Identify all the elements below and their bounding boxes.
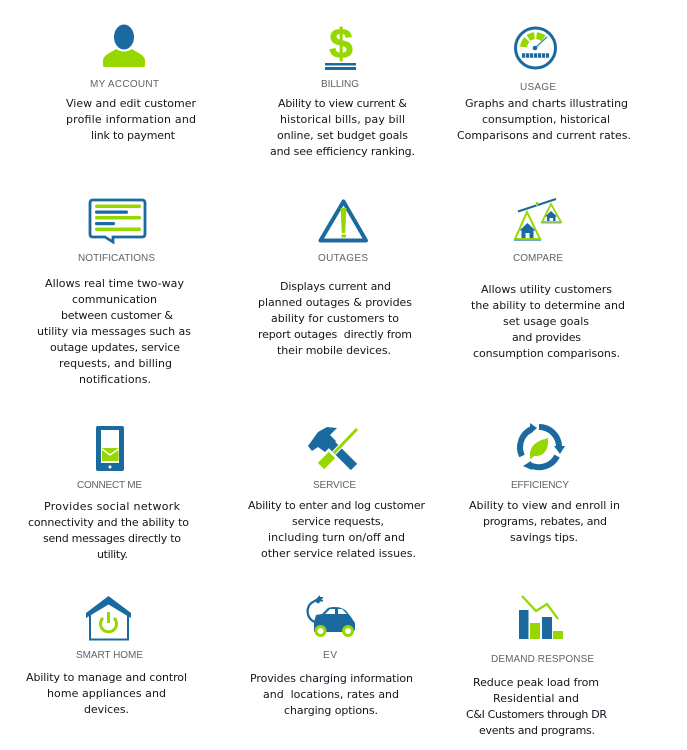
icon: hammer and screwdriver (308, 427, 357, 467)
panel: compare (471, 199, 625, 360)
text block (469, 499, 620, 544)
text block: Displays current and (280, 280, 391, 293)
text block: online, set budget goals (277, 129, 408, 142)
panel: efficiency (469, 423, 620, 544)
text block: historical bills, pay bill (280, 113, 405, 126)
text block: savings tips. (510, 531, 578, 544)
text block: Comparisons and current rates. (457, 129, 631, 142)
text block: link to payment (91, 129, 176, 142)
text block (270, 97, 415, 158)
panel: billing (270, 20, 415, 158)
text block: consumption, historical (482, 113, 610, 126)
text block: report outages directly from (258, 328, 412, 341)
icon: bar chart with trend line (519, 596, 563, 639)
panel: service (248, 427, 425, 560)
text block: ability for customers to (271, 312, 399, 325)
text block (250, 672, 413, 717)
text block (457, 97, 631, 142)
text block: send messages directly to (43, 532, 181, 545)
text block: other service related issues. (261, 547, 416, 560)
text block: between customer & (61, 309, 173, 322)
icon: phone with envelope (96, 426, 124, 471)
icon: speech bubble (90, 200, 145, 242)
icon: warning triangle (320, 202, 366, 240)
text block: Provides social network (44, 500, 181, 513)
text block: notifications. (79, 373, 151, 386)
heading: BILLING (321, 79, 359, 90)
text block: programs, rebates, and (483, 515, 607, 528)
icon: house with power symbol (86, 596, 131, 640)
text block: devices. (84, 703, 129, 716)
heading: SERVICE (313, 480, 356, 491)
text block: planned outages & provides (258, 296, 412, 309)
heading: CONNECT ME (77, 480, 142, 491)
text block: Allows real time two-way (45, 277, 184, 290)
text block: profile information and (66, 113, 196, 126)
text block (26, 671, 187, 716)
icon: balance scale with houses (514, 199, 561, 241)
heading: EFFICIENCY (511, 480, 569, 491)
icon: dollar: $ (329, 20, 353, 67)
panel: usage (457, 28, 631, 142)
icon: person (103, 24, 145, 67)
text block: Reduce peak load from (473, 676, 599, 689)
text block: outage updates, service (50, 341, 180, 354)
text block (248, 499, 425, 560)
text block: C&I Customers through DR (466, 708, 607, 721)
panel: smart home (26, 596, 187, 716)
text block: the ability to determine and (471, 299, 625, 312)
heading: COMPARE (513, 253, 563, 264)
panel: my account (66, 24, 196, 142)
text block: Ability to enter and log customer (248, 499, 425, 512)
text block (37, 277, 191, 386)
heading: DEMAND RESPONSE (491, 654, 594, 665)
heading: OUTAGES (318, 253, 368, 264)
text block: consumption comparisons. (473, 347, 620, 360)
text block: Graphs and charts illustrating (465, 97, 628, 110)
heading: EV (323, 650, 337, 661)
panel: notifications (37, 200, 191, 386)
text block: set usage goals (503, 315, 589, 328)
text block: including turn on/off and (268, 531, 405, 544)
text block (471, 283, 625, 360)
text block: and see efficiency ranking. (270, 145, 415, 158)
text block: connectivity and the ability to (28, 516, 189, 529)
text block: Ability to view and enroll in (469, 499, 620, 512)
panel: outages (258, 202, 412, 357)
text block (466, 676, 607, 737)
text block: and provides (512, 331, 581, 344)
heading: MY ACCOUNT (90, 79, 159, 90)
text block: home appliances and (47, 687, 166, 700)
text block: View and edit customer (66, 97, 196, 110)
text block: Ability to manage and control (26, 671, 187, 684)
icon: electric car (308, 595, 355, 636)
text block: Provides charging information (250, 672, 413, 685)
text block (28, 500, 189, 561)
text block: service requests, (292, 515, 384, 528)
text block: Allows utility customers (481, 283, 612, 296)
text block: requests, and billing (59, 357, 172, 370)
text block: their mobile devices. (277, 344, 391, 357)
heading: SMART HOME (76, 650, 143, 661)
heading: USAGE (520, 82, 556, 93)
panel: demand response (466, 596, 607, 737)
panel: connect me (28, 426, 189, 561)
icon: recycling arrows and leaf (520, 423, 565, 470)
panel: ev (250, 595, 413, 717)
text block: charging options. (284, 704, 378, 717)
text block: communication (72, 293, 157, 306)
text block (258, 280, 412, 357)
text block: events and programs. (479, 724, 595, 737)
heading: NOTIFICATIONS (78, 253, 155, 264)
icon: gauge (516, 28, 556, 68)
text block: Residential and (493, 692, 579, 705)
text block (66, 97, 196, 142)
text block: and locations, rates and (263, 688, 399, 701)
text block: utility via messages such as (37, 325, 191, 338)
text block: Ability to view current & (278, 97, 407, 110)
text block: utility. (97, 548, 128, 561)
